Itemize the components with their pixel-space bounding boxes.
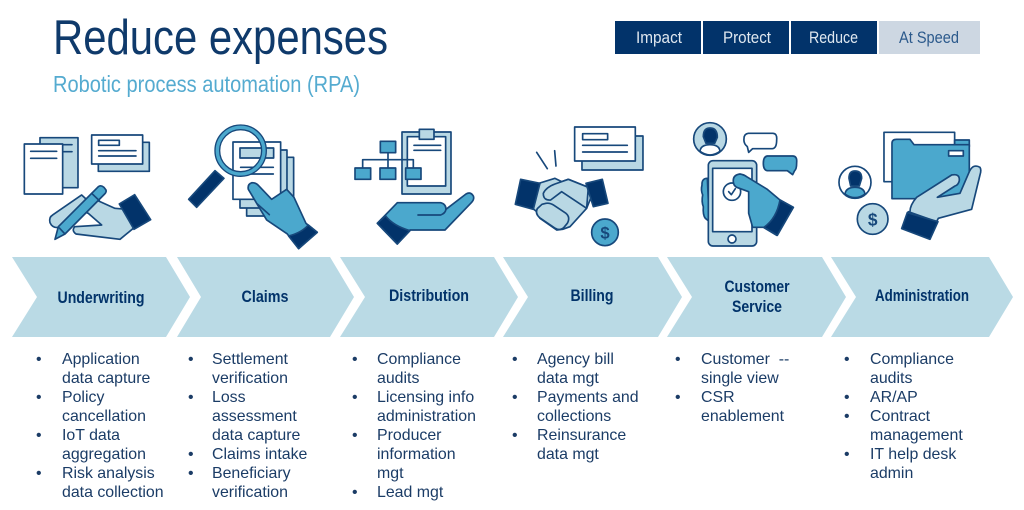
icon: underwriting, documents and hand with pen xyxy=(24,135,151,239)
bullet list: Customer Service: Customer -- xyxy=(701,351,789,368)
bullet list: Administration xyxy=(844,351,963,482)
bullet list: Underwriting: • xyxy=(36,389,42,406)
icon: billing, handshake, invoice and dollar coin xyxy=(515,127,643,246)
navigation tabs: At Speed xyxy=(899,28,959,47)
process arrow: Underwriting: Underwriting xyxy=(58,289,144,307)
process arrow: Billing: Billing xyxy=(570,287,614,305)
process arrow: Customer Service xyxy=(667,257,846,337)
bullet list: Distribution: Producer xyxy=(377,427,442,444)
icon: distribution, org chart and clipboard on open hand xyxy=(355,129,474,244)
bullet list: Distribution: • xyxy=(352,427,358,444)
bullet list: Claims: • xyxy=(188,446,194,463)
bullet list: Administration: audits xyxy=(870,370,912,387)
bullet list: Billing: • xyxy=(512,351,518,368)
bullet list: Claims: Claims intake xyxy=(212,446,308,463)
process arrow: Administration: Administration xyxy=(875,287,969,305)
icon: administration, folder, hand, profile and dollar coin xyxy=(839,132,981,239)
icon: administration, folder, hand, profile and dollar coin: $ xyxy=(868,209,878,229)
bullet list: Customer Service: CSR xyxy=(701,389,735,406)
bullet list: Billing: Reinsurance xyxy=(537,427,626,444)
bullet list: Administration: Contract xyxy=(870,408,931,425)
bullet list: Customer Service: • xyxy=(675,351,681,368)
bullet list: Billing: • xyxy=(512,427,518,444)
bullet list: Administration: AR/AP xyxy=(870,389,918,406)
bullet list: Underwriting: cancellation xyxy=(62,408,146,425)
bullet list: Claims xyxy=(188,351,308,501)
bullet list: Underwriting: • xyxy=(36,465,42,482)
bullet list: Underwriting xyxy=(36,351,164,501)
bullet list: Underwriting: data capture xyxy=(62,370,151,387)
bullet list: Administration: • xyxy=(844,389,850,406)
bullet list: Administration: IT help desk xyxy=(870,446,956,463)
bullet list: Administration: • xyxy=(844,351,850,368)
process arrow: Underwriting xyxy=(12,257,190,337)
bullet list: Customer Service xyxy=(675,351,789,425)
navigation tabs: Reduce xyxy=(809,28,858,47)
bullet list: Customer Service: enablement xyxy=(701,408,785,425)
bullet list: Billing: data mgt xyxy=(537,446,599,463)
bullet list: Claims: • xyxy=(188,465,194,482)
bullet list: Underwriting: Risk analysis xyxy=(62,465,155,482)
navigation tabs xyxy=(615,21,980,54)
process arrow: Administration xyxy=(831,257,1013,337)
bullet list: Underwriting: data collection xyxy=(62,484,164,501)
bullet list: Administration: admin xyxy=(870,465,913,482)
bullet list: Billing: Payments and xyxy=(537,389,639,406)
bullet list: Distribution: Licensing info xyxy=(377,389,474,406)
bullet list: Distribution: • xyxy=(352,484,358,501)
bullet list: Claims: verification xyxy=(212,370,288,387)
bullet list: Administration: management xyxy=(870,427,963,444)
bullet list: Underwriting: • xyxy=(36,427,42,444)
bullet list: Billing: Agency bill xyxy=(537,351,614,368)
bullet list: Claims: Beneficiary xyxy=(212,465,291,482)
bullet list: Claims: assessment xyxy=(212,408,297,425)
bullet list: Customer Service: single view xyxy=(701,370,779,387)
bullet list: Customer Service: • xyxy=(675,389,681,406)
process arrow: Claims xyxy=(177,257,354,337)
bullet list: Billing xyxy=(512,351,639,463)
title: Reduce expenses xyxy=(53,11,388,65)
process arrow: Distribution: Distribution xyxy=(389,287,469,305)
bullet list: Claims: Settlement xyxy=(212,351,289,368)
bullet list: Administration: Compliance xyxy=(870,351,954,368)
navigation tabs: Impact xyxy=(636,28,682,47)
process arrow: Billing xyxy=(503,257,682,337)
bullet list: Distribution: Lead mgt xyxy=(377,484,444,501)
bullet list: Claims: Loss xyxy=(212,389,246,406)
bullet list: Underwriting: Application xyxy=(62,351,140,368)
process arrow: Customer Service: Customer xyxy=(724,278,790,296)
navigation tabs: Protect xyxy=(723,28,771,47)
bullet list: Distribution: • xyxy=(352,351,358,368)
bullet list: Underwriting: Policy xyxy=(62,389,104,406)
subtitle: Robotic process automation (RPA) xyxy=(53,71,360,97)
bullet list: Distribution xyxy=(352,351,476,501)
process arrow: Claims: Claims xyxy=(242,288,288,306)
bullet list: Distribution: Compliance xyxy=(377,351,461,368)
bullet list: Underwriting: • xyxy=(36,351,42,368)
bullet list: Administration: • xyxy=(844,446,850,463)
bullet list: Claims: data capture xyxy=(212,427,301,444)
process arrow: Distribution xyxy=(340,257,518,337)
bullet list: Administration: • xyxy=(844,408,850,425)
bullet list: Distribution: information xyxy=(377,446,456,463)
process arrow: Customer Service: Service xyxy=(732,298,782,316)
bullet list: Billing: • xyxy=(512,389,518,406)
bullet list: Distribution: administration xyxy=(377,408,476,425)
icon: billing, handshake, invoice and dollar coin: $ xyxy=(600,223,610,242)
bullet list: Claims: • xyxy=(188,389,194,406)
bullet list: Claims: • xyxy=(188,351,194,368)
bullet list: Billing: data mgt xyxy=(537,370,599,387)
bullet list: Underwriting: IoT data xyxy=(62,427,120,444)
bullet list: Billing: collections xyxy=(537,408,611,425)
bullet list: Claims: verification xyxy=(212,484,288,501)
icon: claims, magnifier and documents with pointing hand xyxy=(189,127,317,249)
icon: customer service, smartphone with hand and chat bubbles xyxy=(694,123,797,246)
bullet list: Distribution: • xyxy=(352,389,358,406)
bullet list: Distribution: audits xyxy=(377,370,419,387)
bullet list: Underwriting: aggregation xyxy=(62,446,146,463)
bullet list: Distribution: mgt xyxy=(377,465,404,482)
